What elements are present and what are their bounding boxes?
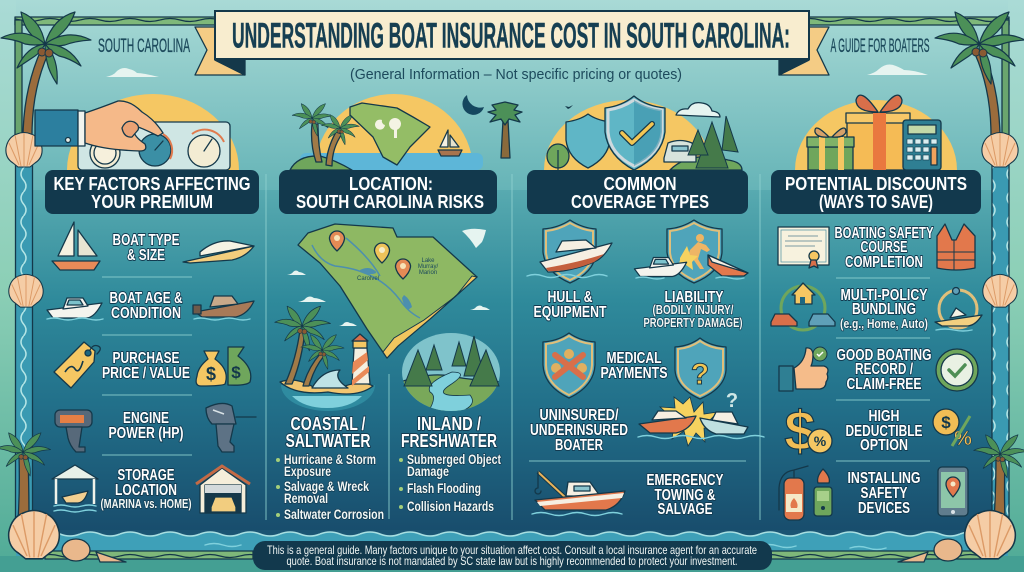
scene: coastal <box>275 306 375 411</box>
panel: discounts <box>771 95 982 520</box>
inland text: INLAND / <box>417 414 481 434</box>
coastal text: Exposure <box>284 463 331 479</box>
item: emergency towing: EMERGENCY <box>646 472 724 489</box>
map labels: Carolvel <box>357 276 379 282</box>
coastal text: SALTWATER <box>286 431 370 451</box>
heading <box>527 170 748 214</box>
item: safety course <box>778 224 975 271</box>
footer disclaimer <box>253 541 772 570</box>
map labels: Murray/ <box>418 264 438 270</box>
moon <box>462 95 484 115</box>
heading <box>279 170 497 214</box>
illustration: hand turning dials <box>35 94 239 170</box>
item: emergency towing <box>532 472 724 518</box>
palm: top right <box>935 12 1024 135</box>
item: storage location <box>52 465 250 513</box>
illustration: shields <box>544 96 742 170</box>
heading: SOUTH CAROLINA RISKS <box>296 192 484 212</box>
item: hull and equipment: HULL & <box>548 289 593 306</box>
inland text: Submerged Object <box>407 451 501 467</box>
item: uninsured boater: UNINSURED/ <box>540 407 619 424</box>
map labels: Lake <box>421 258 435 264</box>
heading: KEY FACTORS AFFECTING <box>54 174 250 194</box>
item: high deductible <box>784 399 972 462</box>
coastal text: Removal <box>284 490 328 506</box>
item: boat age and condition: BOAT AGE & <box>110 290 183 307</box>
subtitle: (General Information – Not specific pricing or quotes) <box>350 66 682 83</box>
item: liability: (BODILY INJURY/ <box>652 302 734 317</box>
item: boat type and size: & SIZE <box>127 247 165 264</box>
map pins <box>329 231 411 279</box>
item: multi-policy: MULTI-POLICY <box>840 287 928 304</box>
item: storage location: STORAGE <box>118 467 175 484</box>
coastal text: Salvage & Wreck <box>284 478 369 494</box>
item: high deductible: DEDUCTIBLE <box>846 423 923 440</box>
item: safety devices <box>779 466 968 520</box>
coastal text <box>276 414 384 522</box>
heading <box>45 170 259 214</box>
footer disclaimer: This is a general guide. Many factors unique to your situation affect cost. Consult a local insurance agent for an accurate <box>267 543 757 557</box>
panel: key factors <box>35 94 259 513</box>
heading: YOUR PREMIUM <box>91 192 213 212</box>
item: safety devices: INSTALLING <box>848 470 920 487</box>
ribbon label left: SOUTH CAROLINA <box>98 36 190 57</box>
item: hull and equipment: EQUIPMENT <box>534 304 607 321</box>
item: safety course: COMPLETION <box>845 254 923 271</box>
panel: location <box>275 94 504 522</box>
item: uninsured boater: BOATER <box>555 437 603 454</box>
heading: (WAYS TO SAVE) <box>819 192 933 212</box>
clouds and mini map <box>287 229 490 326</box>
item: purchase price: PURCHASE <box>112 350 180 367</box>
item: high deductible: % <box>954 428 972 450</box>
coastal text: Hurricane & Storm <box>284 451 376 467</box>
item: medical payments: MEDICAL <box>606 350 662 367</box>
item: safety devices: SAFETY <box>860 485 908 502</box>
title banner <box>195 11 829 75</box>
item: liability: PROPERTY DAMAGE) <box>644 315 742 330</box>
item: good record: CLAIM-FREE <box>846 376 922 393</box>
palm: bottom left <box>0 433 51 520</box>
item: liability: LIABILITY <box>664 289 724 306</box>
sc palmetto <box>488 102 522 158</box>
bottom water band <box>0 530 1024 572</box>
clouds top <box>106 65 928 77</box>
item: safety course: COURSE <box>860 239 908 256</box>
item: safety devices: DEVICES <box>858 500 910 517</box>
inland text <box>399 414 501 514</box>
item: boat age and condition: CONDITION <box>111 305 181 322</box>
inland text: Damage <box>407 463 449 479</box>
heading: COMMON <box>604 174 676 194</box>
item: purchase price: PRICE / VALUE <box>102 365 190 382</box>
scene: inland <box>402 333 500 411</box>
item: purchase price <box>54 342 251 388</box>
footer disclaimer: quote. Boat insurance is not mandated by SC state law but is highly recommended to protect your investment. <box>286 554 738 568</box>
item: emergency towing: TOWING & <box>654 487 716 504</box>
item: high deductible: HIGH <box>868 408 900 425</box>
item: high deductible: $ <box>784 399 816 462</box>
item: uninsured boater: UNDERINSURED <box>530 422 628 439</box>
item: multi-policy <box>771 283 982 331</box>
coastal text: COASTAL / <box>290 414 366 434</box>
inland text: FRESHWATER <box>401 431 497 451</box>
item: uninsured boater <box>530 390 764 454</box>
item: good record: GOOD BOATING <box>836 347 932 364</box>
item: good record <box>779 347 978 393</box>
item: uninsured boater: ? <box>726 390 738 412</box>
banner plate <box>215 11 809 59</box>
item: engine power <box>55 403 256 452</box>
item: good record: RECORD / <box>855 361 913 378</box>
item: purchase price: $ <box>206 364 216 384</box>
item: high deductible: OPTION <box>860 437 908 454</box>
illustration: gifts and calculator <box>795 95 957 170</box>
map labels: Marion <box>419 270 437 276</box>
heading: COVERAGE TYPES <box>571 192 709 212</box>
inland text: Flash Flooding <box>407 480 481 496</box>
shells <box>6 132 1018 562</box>
map labels <box>357 258 438 282</box>
column dividers <box>266 174 760 520</box>
panel: coverage <box>527 96 764 518</box>
sky panel <box>16 0 1008 190</box>
inland text: Collision Hazards <box>407 498 494 514</box>
item: medical payments: PAYMENTS <box>600 365 668 382</box>
item: hull and equipment <box>527 220 612 321</box>
item: engine power: ENGINE <box>123 410 169 427</box>
heading <box>771 170 981 214</box>
ribbon tail left <box>195 27 245 75</box>
item: high deductible: % <box>814 433 827 449</box>
palm: bottom right <box>974 435 1024 520</box>
item: engine power: POWER (HP) <box>108 425 184 442</box>
sea panel <box>16 190 1008 535</box>
item: boat age and condition <box>47 290 254 322</box>
item: multi-policy: BUNDLING <box>852 301 916 318</box>
palm: top left <box>1 12 91 135</box>
item: high deductible: $ <box>941 413 951 432</box>
item: boat type and size <box>52 222 254 270</box>
item: liability <box>634 220 748 330</box>
illustration: SC coast <box>290 94 483 170</box>
heading: LOCATION: <box>349 174 433 194</box>
heading: POTENTIAL DISCOUNTS <box>785 174 967 194</box>
item: storage location: LOCATION <box>115 482 177 499</box>
item: boat type and size: BOAT TYPE <box>112 232 180 249</box>
item: medical payments: ? <box>691 358 709 391</box>
item: storage location: (MARINA vs. HOME) <box>100 496 192 511</box>
item: medical payments <box>543 333 726 399</box>
coastal text: Saltwater Corrosion <box>284 506 384 522</box>
item: safety course: BOATING SAFETY <box>834 225 934 242</box>
item: emergency towing: SALVAGE <box>658 501 713 518</box>
item: multi-policy: (e.g., Home, Auto) <box>840 316 928 331</box>
item: purchase price: $ <box>231 363 241 382</box>
big state map <box>298 224 477 358</box>
ribbon tail right <box>779 27 829 75</box>
